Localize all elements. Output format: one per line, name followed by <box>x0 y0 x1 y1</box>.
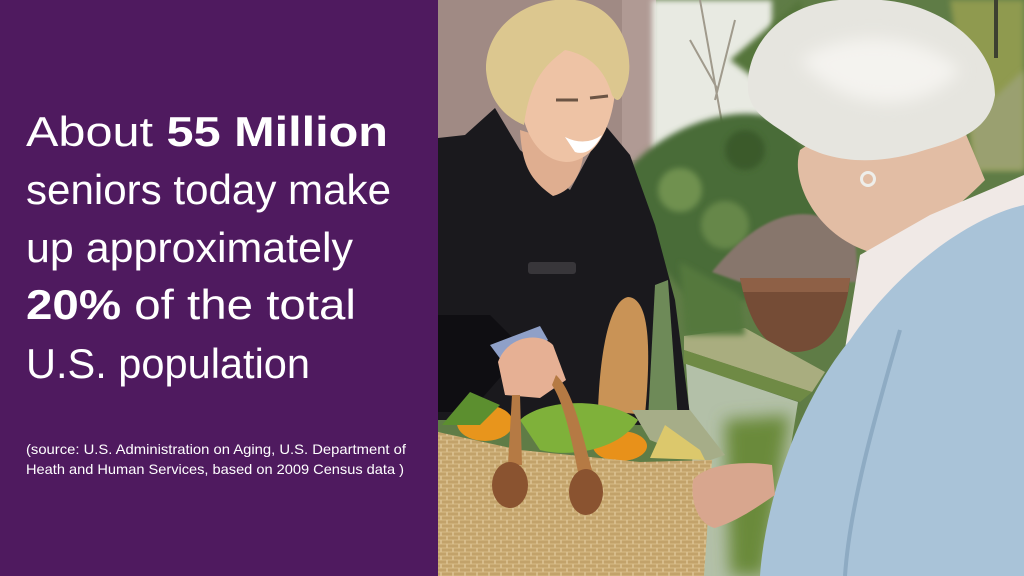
headline statistic text <box>26 108 391 387</box>
potted heather plant <box>712 214 858 352</box>
senior woman in pale blue cardigan <box>692 0 1024 576</box>
source note <box>26 441 406 477</box>
source note: (source: U.S. Administration on Aging, U.S. Department of <box>26 441 406 457</box>
woven shopping basket <box>438 375 712 576</box>
younger woman in black coat <box>438 0 690 425</box>
photo: woman delivering groceries to a senior <box>438 0 1024 576</box>
stone ledge and mossy wall <box>680 262 825 576</box>
groceries: baguette, leek, citrus and greens <box>442 280 725 462</box>
headline statistic text: up approximately <box>26 224 353 271</box>
panel: purple text background <box>0 0 438 576</box>
source note: Heath and Human Services, based on 2009 Census data ) <box>26 461 404 477</box>
headline statistic text: About 55 Million <box>26 108 388 155</box>
headline statistic text: seniors today make <box>26 166 391 213</box>
headline statistic text: 20% of the total <box>26 281 356 328</box>
photo background: building and garden <box>438 0 1024 462</box>
headline statistic text: U.S. population <box>26 340 310 387</box>
